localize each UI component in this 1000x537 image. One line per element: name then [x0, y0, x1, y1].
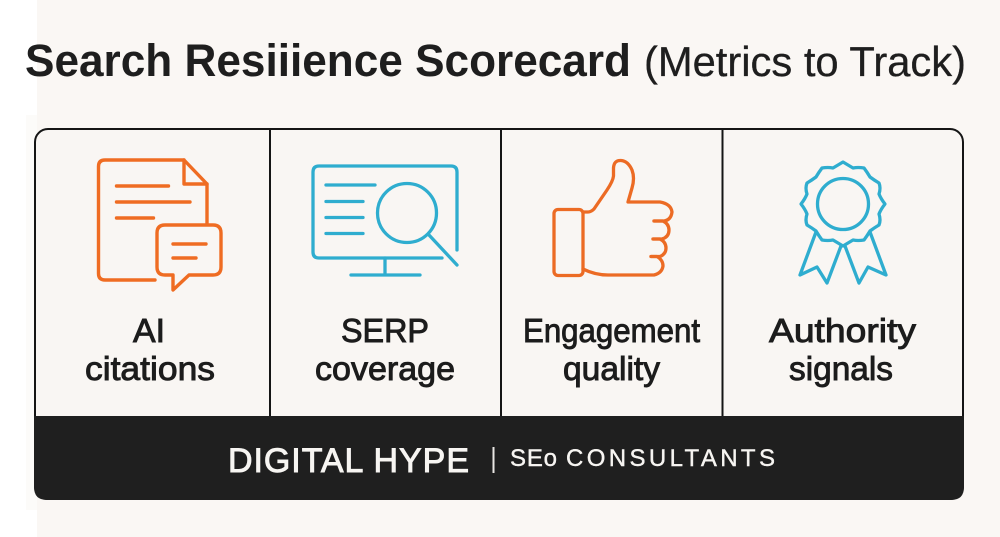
- label: Authority signals: [769, 312, 917, 387]
- label: Authority signals: Authority: [769, 312, 917, 349]
- label: Engagement quality: quality: [563, 350, 661, 387]
- label: SERP coverage: [315, 312, 455, 387]
- panel: SERP coverage: [313, 166, 457, 387]
- title: [25, 35, 966, 86]
- scorecard panel: [34, 129, 964, 500]
- brand tagline: SEo: [510, 445, 557, 472]
- panel: AI citations: [85, 160, 221, 387]
- title: Search Resiiience Scorecard: [25, 35, 631, 86]
- panel: Engagement quality: [523, 160, 700, 387]
- label: Engagement quality: Engagement: [523, 312, 700, 349]
- label: SERP coverage: coverage: [315, 350, 455, 387]
- label: SERP coverage: SERP: [341, 312, 429, 349]
- brand name: DIGITAL HYPE: [228, 442, 469, 480]
- icon: award ribbon: [800, 162, 886, 283]
- icon: document with speech bubble: [98, 160, 221, 290]
- title: (Metrics to Track): [644, 38, 966, 85]
- label: AI citations: citations: [85, 350, 215, 387]
- label: AI citations: [85, 312, 215, 387]
- brand tagline: CONSULTANTS: [566, 445, 775, 472]
- icon: monitor with magnifier: [313, 166, 457, 275]
- footer band: [34, 416, 964, 500]
- panel: Authority signals: [769, 162, 917, 387]
- icon: thumbs up: [554, 160, 672, 276]
- label: Engagement quality: [523, 312, 700, 387]
- label: Authority signals: signals: [789, 350, 893, 387]
- separator: [492, 447, 494, 473]
- label: AI citations: AI: [133, 312, 165, 349]
